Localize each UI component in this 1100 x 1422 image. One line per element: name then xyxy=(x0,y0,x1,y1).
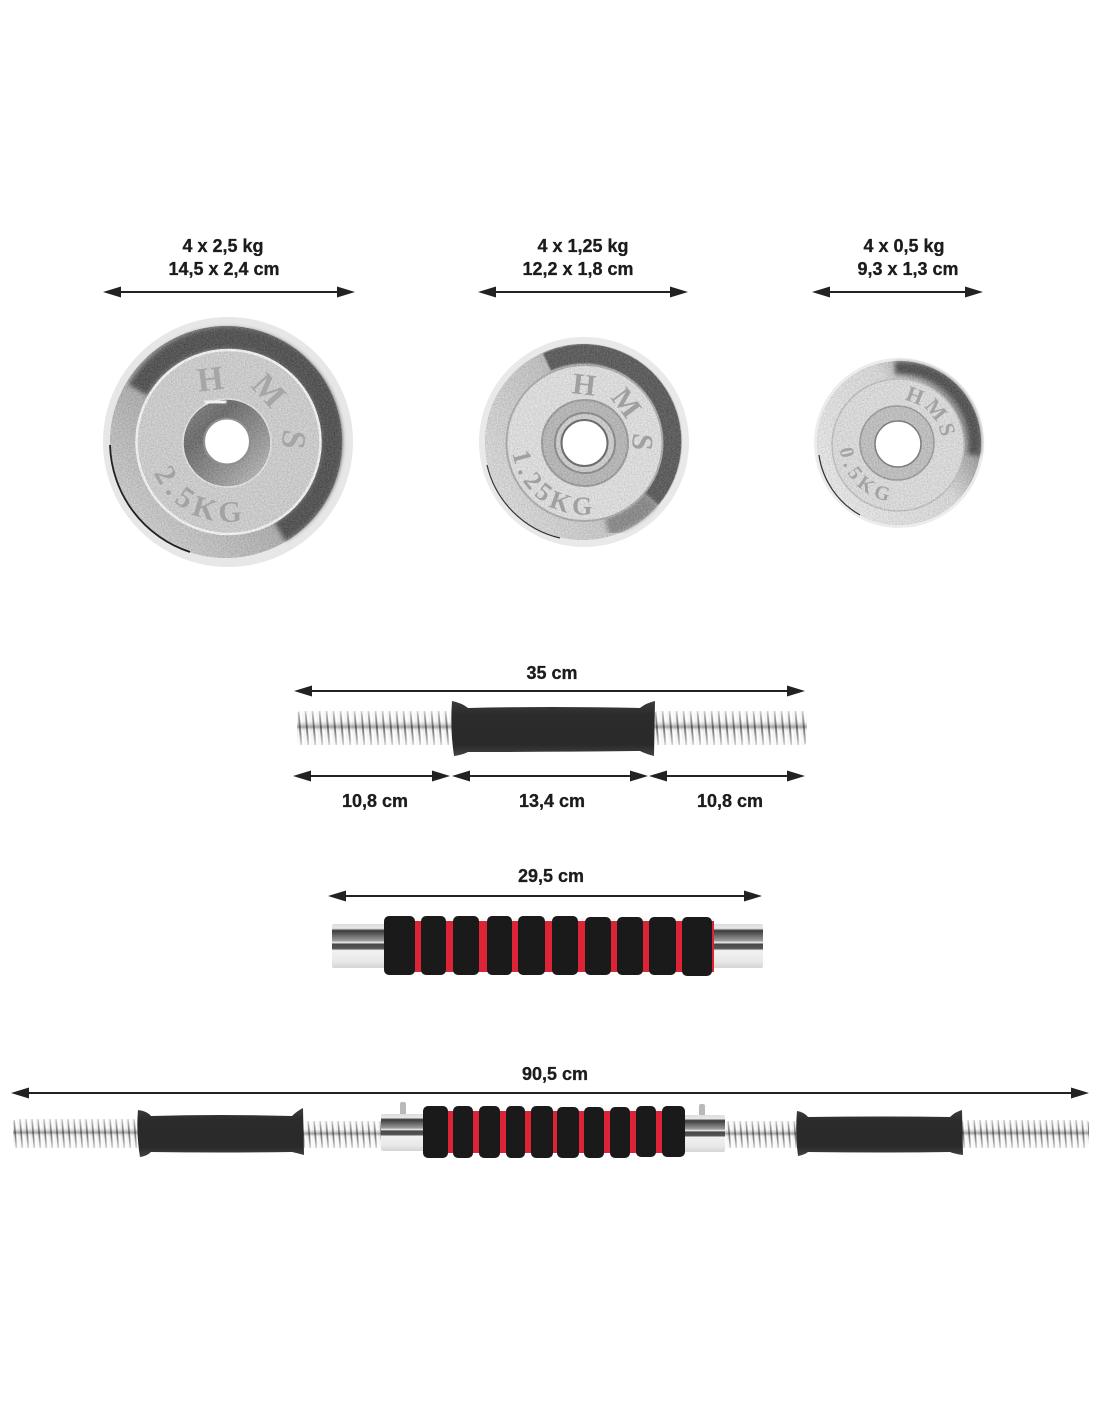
label: 2.5 kg plate: 14,5 x 2,4 cm xyxy=(168,259,280,279)
label: 1.25 kg plate: 12,2 x 1,8 cm xyxy=(522,259,634,279)
labels: section lengths: 10,8 cm xyxy=(697,791,763,811)
plate: 1.25 kg xyxy=(479,337,689,547)
label: 0.5 kg plate: 4 x 0,5 kg xyxy=(863,236,945,256)
plate: 2.5 kg xyxy=(103,317,353,567)
label: total length 90,5 cm: 90,5 cm xyxy=(522,1064,588,1084)
labels: section lengths: 13,4 cm xyxy=(519,791,585,811)
label: 1.25 kg plate xyxy=(522,236,634,279)
plate: 2.5 kg: 2.5KG xyxy=(154,465,241,522)
labels: section lengths xyxy=(342,791,763,811)
label: 0.5 kg plate: 9,3 x 1,3 cm xyxy=(857,259,959,279)
plate: 0.5 kg: HMS xyxy=(904,386,955,436)
label: bar length 35 cm: 35 cm xyxy=(526,663,578,683)
plate: 2.5 kg: HMS xyxy=(196,366,305,448)
arrows: section lengths xyxy=(293,770,805,782)
foam centre xyxy=(423,1106,685,1158)
thread sections xyxy=(13,1119,1089,1148)
chrome sleeves xyxy=(381,1114,725,1152)
arrow: 2.5 kg plate width xyxy=(103,286,355,298)
connector tube with foam grip xyxy=(332,916,763,976)
rubber grips xyxy=(137,1108,963,1157)
assembled barbell xyxy=(13,1102,1089,1158)
plate: 1.25 kg: HMS xyxy=(572,374,652,449)
arrow: 35 cm xyxy=(294,686,805,696)
locking pins xyxy=(400,1102,705,1116)
dumbbell handle: threaded bar with grip xyxy=(297,701,807,756)
arrow: 29,5 cm xyxy=(328,890,762,902)
labels: section lengths: 10,8 cm xyxy=(342,791,408,811)
plate: 0.5 kg xyxy=(814,358,984,528)
label: 1.25 kg plate: 4 x 1,25 kg xyxy=(537,236,629,256)
arrow: 90,5 cm xyxy=(11,1088,1089,1098)
arrow: 0.5 kg plate width xyxy=(812,286,983,298)
label: 0.5 kg plate xyxy=(857,236,959,279)
label: 2.5 kg plate xyxy=(168,236,280,279)
plate: 1.25 kg: 1.25KG xyxy=(512,451,592,515)
label: connector length 29,5 cm: 29,5 cm xyxy=(518,866,584,886)
label: 2.5 kg plate: 4 x 2,5 kg xyxy=(182,236,264,256)
plate: 0.5 kg: 0.5KG xyxy=(840,448,889,500)
arrow: 1.25 kg plate width xyxy=(478,286,688,298)
